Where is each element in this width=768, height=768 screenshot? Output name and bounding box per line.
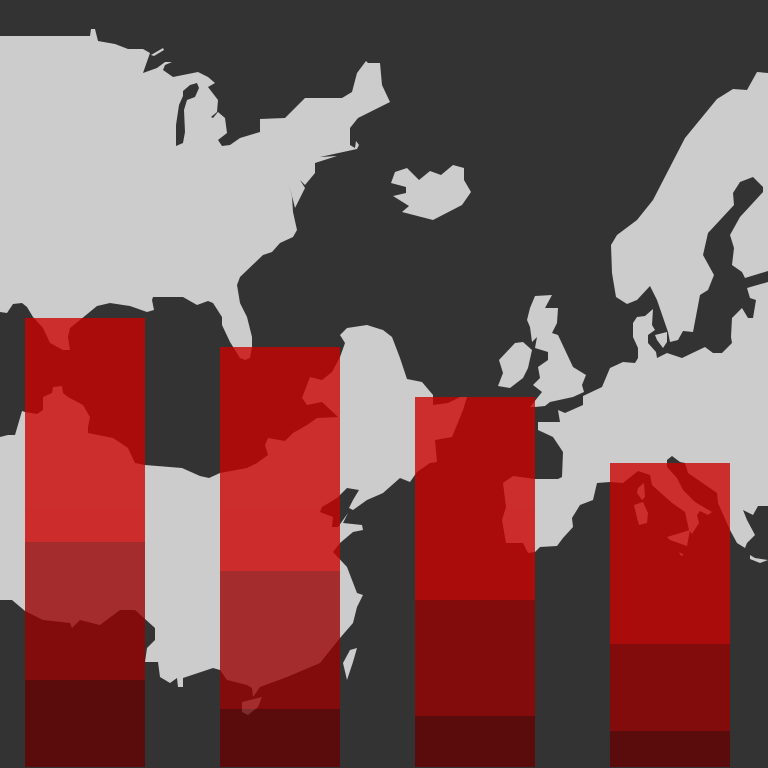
segment: top bbox=[610, 463, 730, 644]
segment: top bbox=[25, 318, 145, 542]
bar: second stack bbox=[220, 347, 340, 767]
land: Malta bbox=[679, 552, 684, 556]
land: Isle Royale bbox=[151, 48, 164, 56]
segment: bottom bbox=[220, 709, 340, 767]
land: Great Britain bbox=[527, 295, 586, 407]
segment: middle bbox=[25, 542, 145, 680]
land: Taiwan bbox=[343, 648, 357, 680]
land: Zealand bbox=[655, 332, 667, 348]
land: Corsica bbox=[637, 483, 645, 500]
segment: bottom bbox=[25, 680, 145, 767]
land: Asia bbox=[0, 325, 467, 697]
segment: bottom bbox=[610, 731, 730, 767]
segment: middle bbox=[610, 644, 730, 731]
land: continental Europe bbox=[502, 282, 768, 553]
bar: third stack bbox=[415, 397, 535, 767]
bar: first stack bbox=[25, 318, 145, 767]
land: Ireland bbox=[498, 342, 532, 388]
segment: middle bbox=[220, 571, 340, 709]
land: United States bbox=[0, 29, 390, 360]
bar: fourth stack bbox=[610, 463, 730, 767]
land: Scandinavia bbox=[611, 72, 768, 342]
land: Sardinia bbox=[634, 502, 648, 525]
land: Crete bbox=[750, 555, 768, 563]
segment: middle bbox=[415, 600, 535, 716]
segment: top bbox=[415, 397, 535, 600]
segment: top bbox=[220, 347, 340, 571]
land: Sicily bbox=[667, 530, 690, 546]
land: Iceland bbox=[391, 165, 471, 220]
segment: bottom bbox=[415, 716, 535, 767]
lake: Michigan and Huron bbox=[176, 83, 199, 146]
land: Hainan bbox=[242, 697, 262, 715]
